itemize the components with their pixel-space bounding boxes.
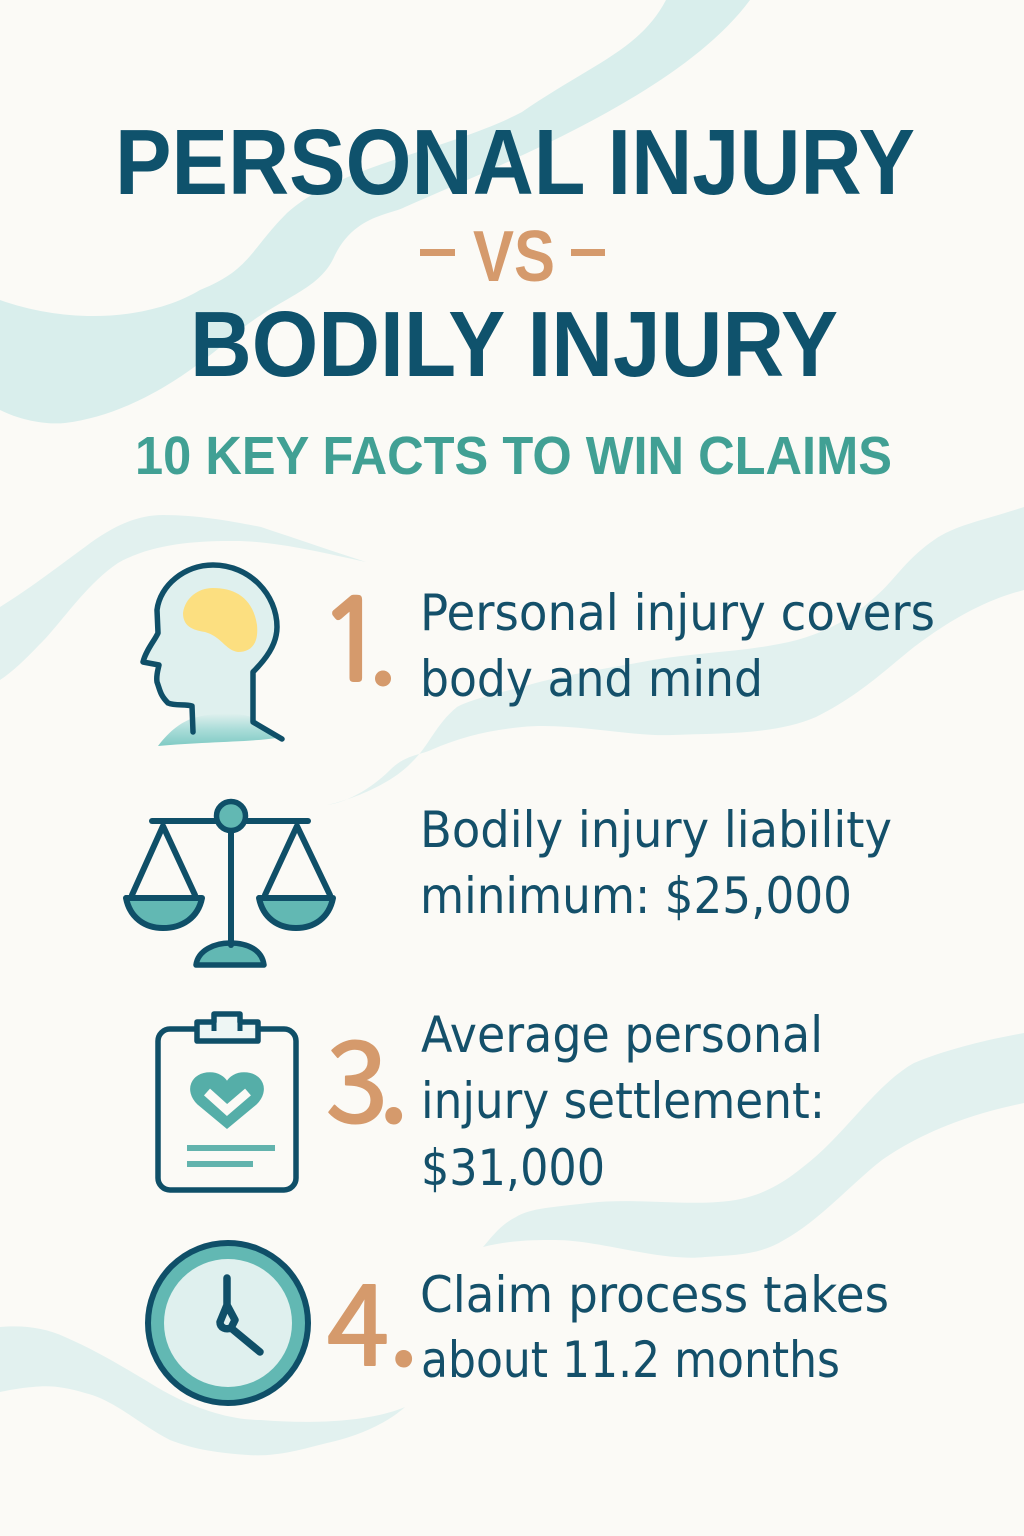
fact 2 text: minimum: $25,000 bbox=[420, 867, 852, 925]
title line: bodily injury: BODILY INJURY bbox=[190, 292, 838, 396]
fact 1 text: body and mind bbox=[420, 650, 763, 708]
vs divider bbox=[420, 217, 605, 297]
icon: scales of justice bbox=[126, 802, 333, 965]
number 1: 1. bbox=[319, 585, 399, 695]
fact 3 text: $31,000 bbox=[421, 1139, 605, 1197]
vs divider: VS bbox=[473, 217, 555, 297]
fact 2 text: Bodily injury liability bbox=[420, 801, 892, 859]
fact 4 text bbox=[420, 1266, 889, 1389]
fact 1 text: Personal injury covers bbox=[420, 584, 935, 642]
subtitle: 10 KEY FACTS TO WIN CLAIMS bbox=[135, 426, 892, 486]
number 3: 3. bbox=[326, 993, 409, 1155]
fact 3 text: injury settlement: bbox=[421, 1072, 825, 1130]
icon: clipboard with heart bbox=[158, 1014, 296, 1190]
fact 2 text bbox=[420, 801, 892, 925]
number 4: 4. bbox=[327, 1236, 419, 1398]
fact 4 text: Claim process takes bbox=[420, 1266, 889, 1324]
fact 1 text bbox=[420, 584, 935, 708]
icon: clock bbox=[148, 1243, 308, 1403]
fact 4 text: about 11.2 months bbox=[421, 1331, 840, 1389]
fact 3 text bbox=[421, 1006, 825, 1197]
title bbox=[115, 110, 915, 396]
title line: personal injury: PERSONAL INJURY bbox=[115, 110, 915, 214]
fact 3 text: Average personal bbox=[421, 1006, 823, 1064]
icon: head with brain bbox=[143, 565, 282, 746]
